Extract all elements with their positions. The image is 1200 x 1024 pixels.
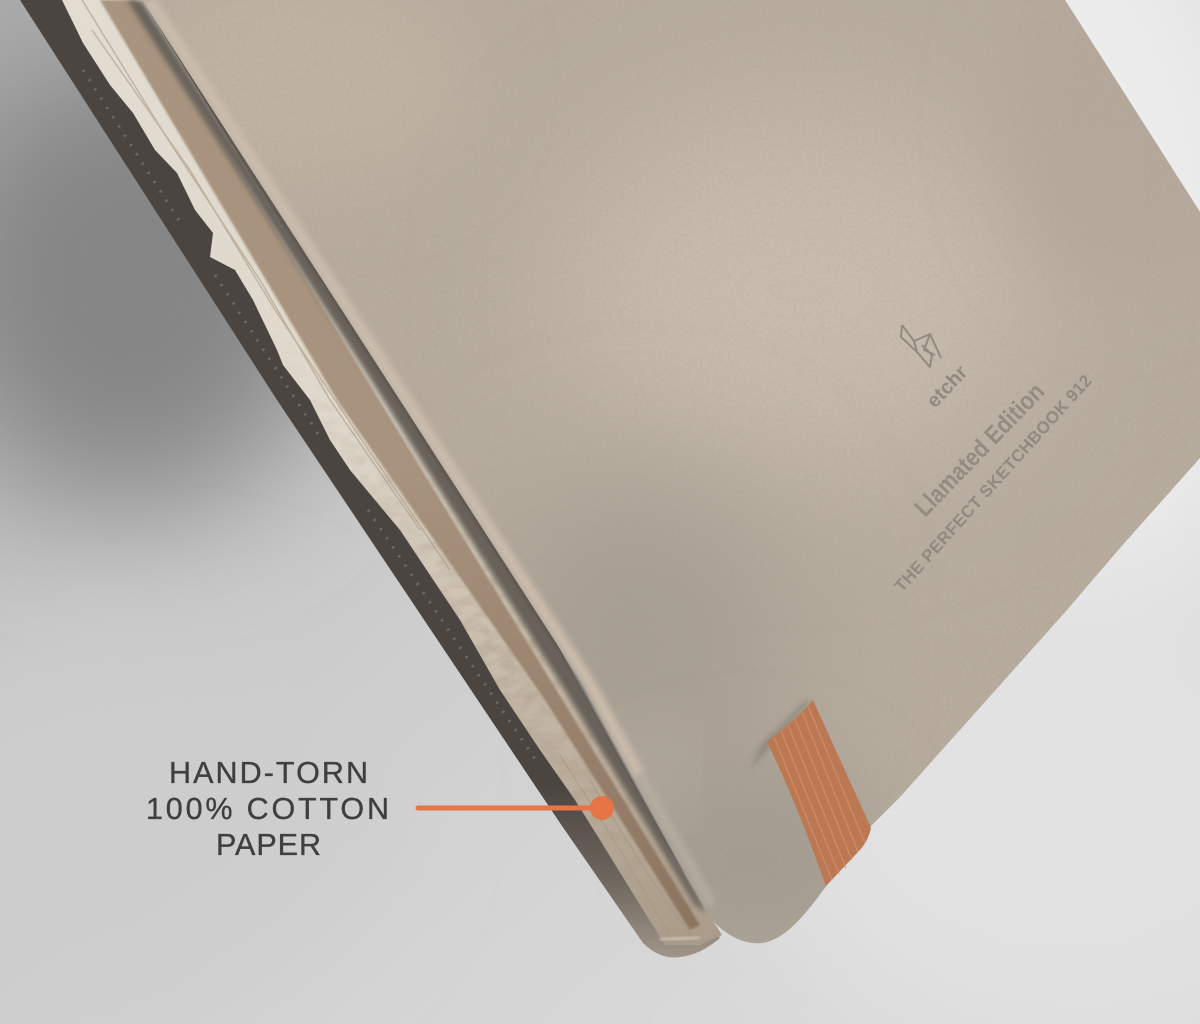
- brown inner page stain band: [100, 0, 700, 930]
- torn paper edge: [62, 0, 722, 945]
- emboss: etchr wordmark: etchr: [923, 361, 972, 412]
- emboss: product name: THE PERFECT SKETCHBOOK 912: [891, 371, 1096, 596]
- emboss: edition name: Llamated Edition: [909, 378, 1050, 522]
- callout text: [146, 756, 389, 862]
- callout text: HAND-TORN: [169, 756, 368, 790]
- back cover: dark binding strip: [20, 0, 720, 957]
- elastic band: copper closure strap: [750, 700, 871, 886]
- callout text: 100% COTTON: [146, 792, 389, 826]
- pointer line with dot: [418, 796, 614, 820]
- emboss: llama logo: [901, 325, 941, 367]
- callout: label and pointer: [146, 756, 614, 862]
- cover shadow on paper: [127, 0, 707, 913]
- callout text: PAPER: [216, 828, 321, 862]
- highlights on back cover binding: [83, 70, 539, 765]
